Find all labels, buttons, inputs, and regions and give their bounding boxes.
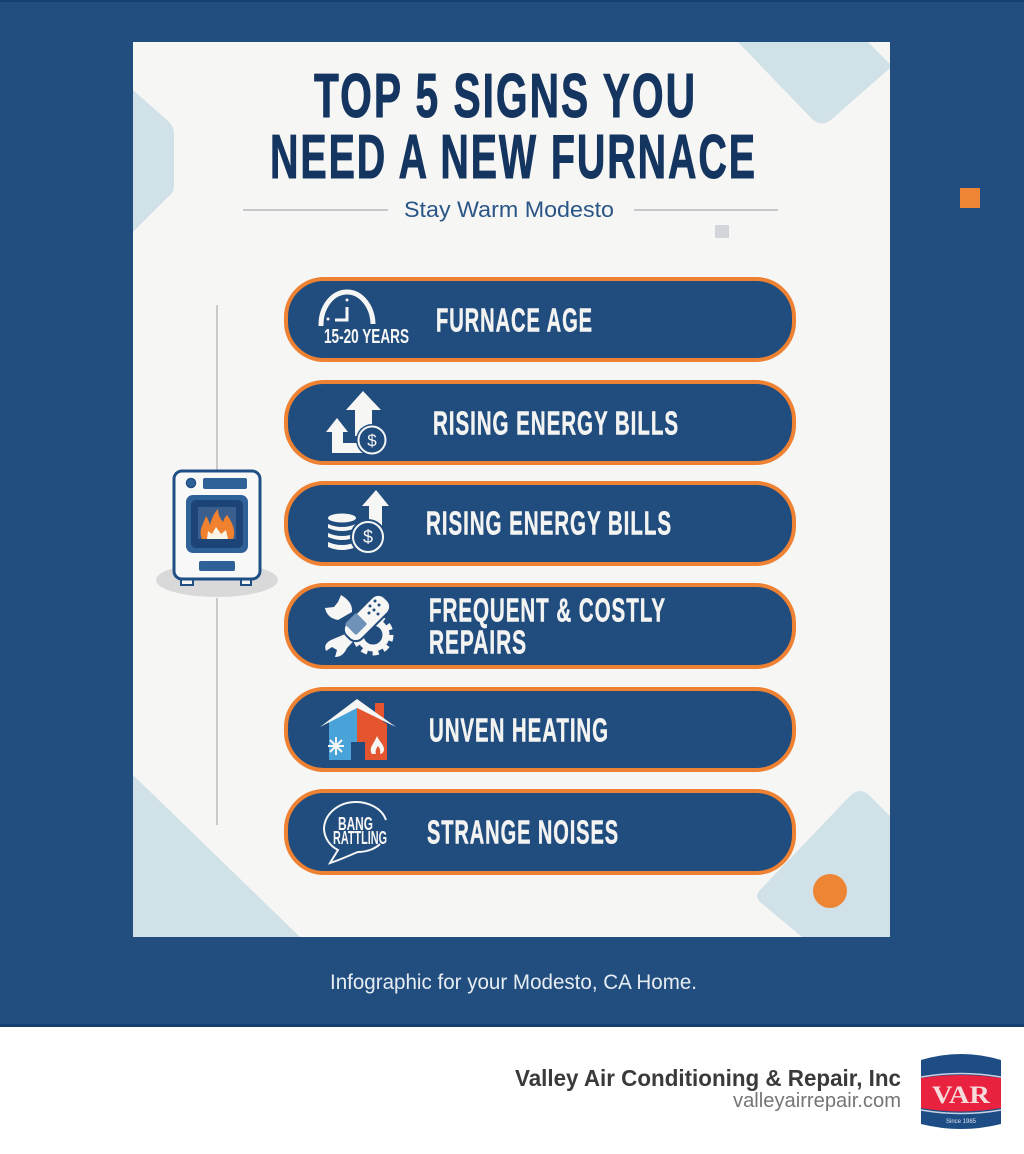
icon: clock gauge <box>321 292 409 348</box>
icon: speech bubble <box>324 802 387 863</box>
icon: orange square accent <box>960 188 980 208</box>
icon: coin stack and arrow: $ <box>363 527 373 547</box>
panel: main card <box>133 42 890 937</box>
item: frequent and costly repairs: REPAIRS <box>429 624 527 660</box>
footer: website: valleyairrepair.com <box>733 1090 901 1112</box>
item: uneven heating: UNVEN HEATING <box>429 712 609 748</box>
item: strange noises: STRANGE NOISES <box>427 814 619 850</box>
footer: company name: Valley Air Conditioning & Repair, Inc <box>515 1065 901 1091</box>
subtitle: Stay Warm Modesto <box>404 197 614 222</box>
icon: speech bubble: BANG <box>338 814 373 834</box>
icon: coin stack and arrow <box>328 490 389 555</box>
item: frequent and costly repairs: FREQUENT & COSTLY <box>429 592 666 628</box>
item: rising energy bills 1 <box>286 382 794 463</box>
item: frequent and costly repairs <box>286 585 794 667</box>
icon: clock gauge: 15-20 YEARS <box>324 326 409 348</box>
logo <box>921 1054 1001 1129</box>
item: rising energy bills 2 <box>286 483 794 564</box>
item: furnace age <box>286 279 794 360</box>
icon: furnace <box>156 471 278 597</box>
logo: Since 1985 <box>946 1119 977 1125</box>
icon: speech bubble: RATTLING <box>333 828 387 848</box>
item: rising energy bills 2: RISING ENERGY BILLS <box>426 504 672 542</box>
timeline line <box>216 305 218 825</box>
caption: Infographic for your Modesto, CA Home. <box>330 971 697 994</box>
title <box>270 62 757 192</box>
title: NEED A NEW FURNACE <box>270 123 757 192</box>
icon: house hot and cold <box>320 699 396 760</box>
item: uneven heating <box>286 689 794 770</box>
item: rising energy bills 1: RISING ENERGY BILLS <box>433 404 679 442</box>
item: strange noises <box>286 791 794 873</box>
icon: arrows and coin <box>326 391 388 456</box>
icon: wrench, remote and gear <box>325 591 394 657</box>
item: furnace age: FURNACE AGE <box>436 302 593 338</box>
title: TOP 5 SIGNS YOU <box>314 62 697 131</box>
icon: arrows and coin: $ <box>367 431 377 450</box>
logo: VAR <box>932 1082 991 1109</box>
